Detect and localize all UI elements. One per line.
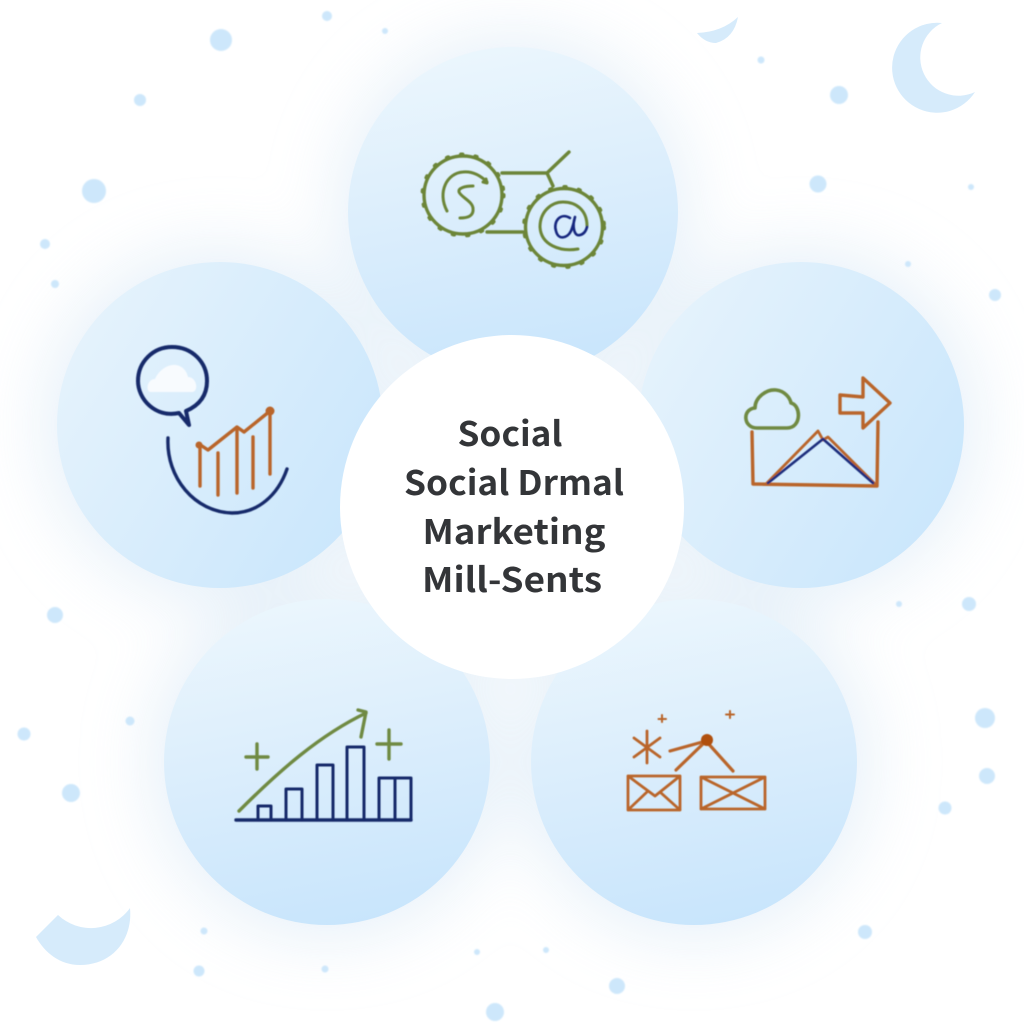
icon: crescent moon top right xyxy=(892,23,975,113)
icon: network node with envelopes xyxy=(628,711,765,810)
panel: bottom right circle xyxy=(531,599,857,925)
panel: center circle xyxy=(340,335,684,679)
panel: bottom left circle xyxy=(164,599,490,925)
icon: cloud, envelope and arrow xyxy=(746,378,890,486)
icon: linked gears with symbols xyxy=(422,152,604,267)
panel: right circle xyxy=(638,262,964,588)
icon: small crescent moon top xyxy=(697,17,738,43)
icon: growth chart with arrow xyxy=(236,710,411,820)
panel: top circle xyxy=(348,47,678,377)
title xyxy=(404,407,624,602)
icon: crescent moon bottom left xyxy=(36,908,130,965)
title: Marketing xyxy=(422,505,606,554)
panel: left circle xyxy=(57,262,383,588)
icon: speech bubble with cloud and bar chart xyxy=(138,347,287,513)
title: Mill-Sents xyxy=(422,553,602,602)
title: Social xyxy=(458,407,562,456)
title: Social Drmal xyxy=(404,456,624,505)
